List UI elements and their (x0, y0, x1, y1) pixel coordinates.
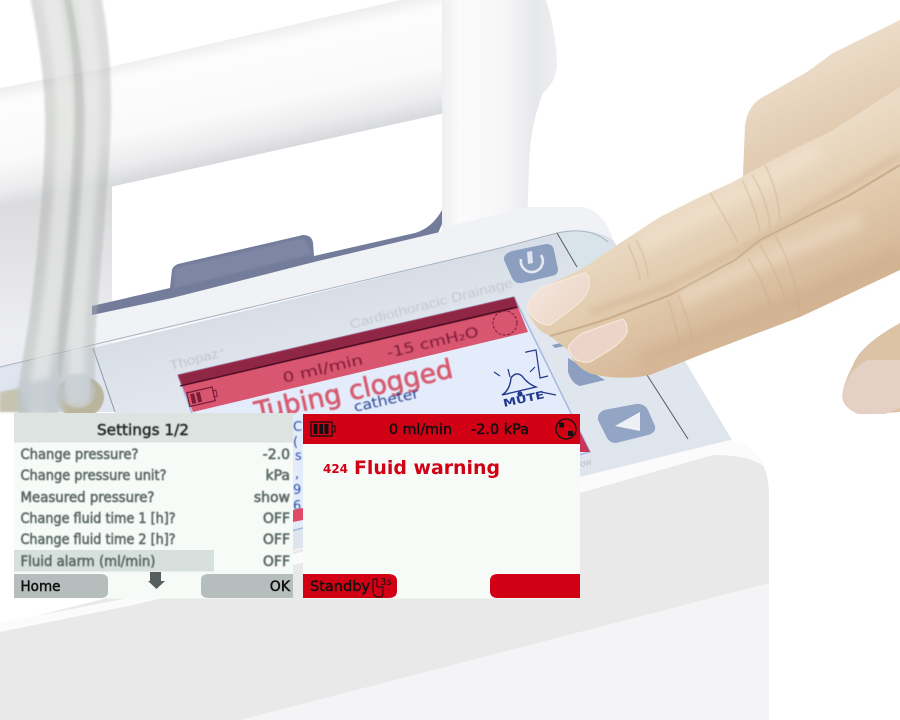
small panel label: ow (579, 456, 593, 469)
screen text fragments between overlays (293, 420, 302, 514)
settings rows (20, 447, 290, 570)
highlighted row (14, 550, 214, 572)
screen red status band (178, 297, 528, 412)
brand text: Thopaz+: Thopaz⁺ (168, 345, 228, 373)
red status bar (303, 414, 580, 444)
row: change pressure unit (20, 468, 290, 484)
device body white lip (0, 440, 769, 632)
warning panel background (303, 414, 580, 598)
thumb (842, 323, 900, 414)
status band reading: 0 ml/min (281, 352, 365, 387)
panel outline lines (0, 231, 688, 439)
icon: scroll down arrow (148, 572, 165, 589)
power button (504, 244, 558, 283)
screen text fragments between overlays: 6 (293, 499, 301, 514)
row: change pressure (20, 447, 290, 463)
partly hidden buttons under fingers (552, 340, 605, 386)
screen text fragments between overlays: , (295, 467, 299, 482)
row: measured pressure: show (254, 490, 290, 506)
handle side support (442, 0, 557, 245)
screen overlay: settings menu (14, 413, 293, 598)
row: change fluid time 2: Change fluid time 2 [h]? (20, 532, 176, 548)
row: fluid alarm: Fluid alarm (ml/min) (20, 554, 156, 570)
screen text fragments between overlays: ( (293, 435, 298, 450)
upper-right panel corner (557, 231, 640, 290)
row: change fluid time 2 (20, 532, 290, 548)
warning code and title: 424 (323, 461, 348, 476)
ring finger (743, 20, 900, 220)
standby softkey (303, 574, 397, 598)
OK softkey (201, 574, 293, 598)
finger crease and shading (550, 150, 900, 360)
screen overlay: fluid warning (303, 414, 580, 598)
transparent drainage tubes (18, 0, 93, 415)
row: change fluid time 2: OFF (263, 532, 290, 548)
warning code and title: Fluid warning (354, 457, 500, 479)
mute bell icon (494, 350, 556, 396)
row: change fluid time 1 (20, 511, 290, 527)
area under the handle (0, 186, 112, 372)
row: change fluid time 1: OFF (263, 511, 290, 527)
middle fingernail (568, 319, 627, 362)
device screen photo (178, 297, 590, 545)
row: fluid alarm (20, 554, 290, 570)
settings header (14, 413, 293, 442)
row: change pressure unit: kPa (266, 468, 290, 484)
device screen photo: -15 cmH₂O (385, 325, 480, 362)
left side lip (0, 347, 115, 412)
screen text fragments between overlays: s (295, 449, 302, 464)
row: change pressure: -2.0 (263, 447, 290, 463)
brand text: Cardiothoracic Drainage: Cardiothoracic Drainage (348, 276, 514, 332)
screen message text: catheter (352, 386, 421, 416)
screen background (178, 297, 590, 545)
OK softkey: OK (270, 579, 291, 595)
index and middle fingers (527, 87, 900, 378)
screen text fragments between overlays: C (293, 420, 302, 435)
knuckle wrinkles (628, 165, 800, 345)
screen heading: Tubing clogged: Tubing clogged (251, 354, 456, 428)
row: measured pressure (20, 490, 290, 506)
carrying handle (0, 0, 445, 208)
mute label: MUTE (502, 389, 546, 410)
row: change pressure unit: Change pressure unit? (20, 468, 166, 484)
icon: battery (311, 422, 335, 436)
icon: vacuum pump status (556, 419, 576, 439)
flow and pressure readings: 0 ml/min (389, 422, 452, 438)
row: change fluid time 1: Change fluid time 1 [h]? (20, 511, 176, 527)
device lower body (0, 441, 769, 720)
blank red softkey (490, 574, 580, 598)
recess strip and tab (92, 210, 442, 330)
standby softkey: 3s (380, 577, 392, 588)
row: measured pressure: Measured pressure? (20, 490, 154, 506)
status band battery icon (187, 386, 218, 407)
screen lower red bars (293, 508, 303, 522)
standby softkey: Standby (310, 579, 370, 595)
home softkey: Home (20, 579, 60, 595)
settings panel background (14, 413, 293, 598)
arrow button (598, 404, 655, 443)
row: change pressure: Change pressure? (20, 447, 138, 463)
row: fluid alarm: OFF (263, 554, 290, 570)
index fingernail (527, 273, 589, 325)
hand (527, 20, 900, 414)
control panel (93, 231, 732, 590)
screen text fragments between overlays: 9 (293, 483, 301, 498)
status band vacuum icon (493, 311, 517, 335)
red status bar: -2.0 kPa (471, 422, 529, 438)
icon: pressing hand (373, 579, 383, 597)
beige tube port (0, 376, 104, 418)
top lip of control panel (92, 207, 613, 347)
home softkey (14, 574, 108, 598)
settings header: Settings 1/2 (97, 421, 189, 439)
